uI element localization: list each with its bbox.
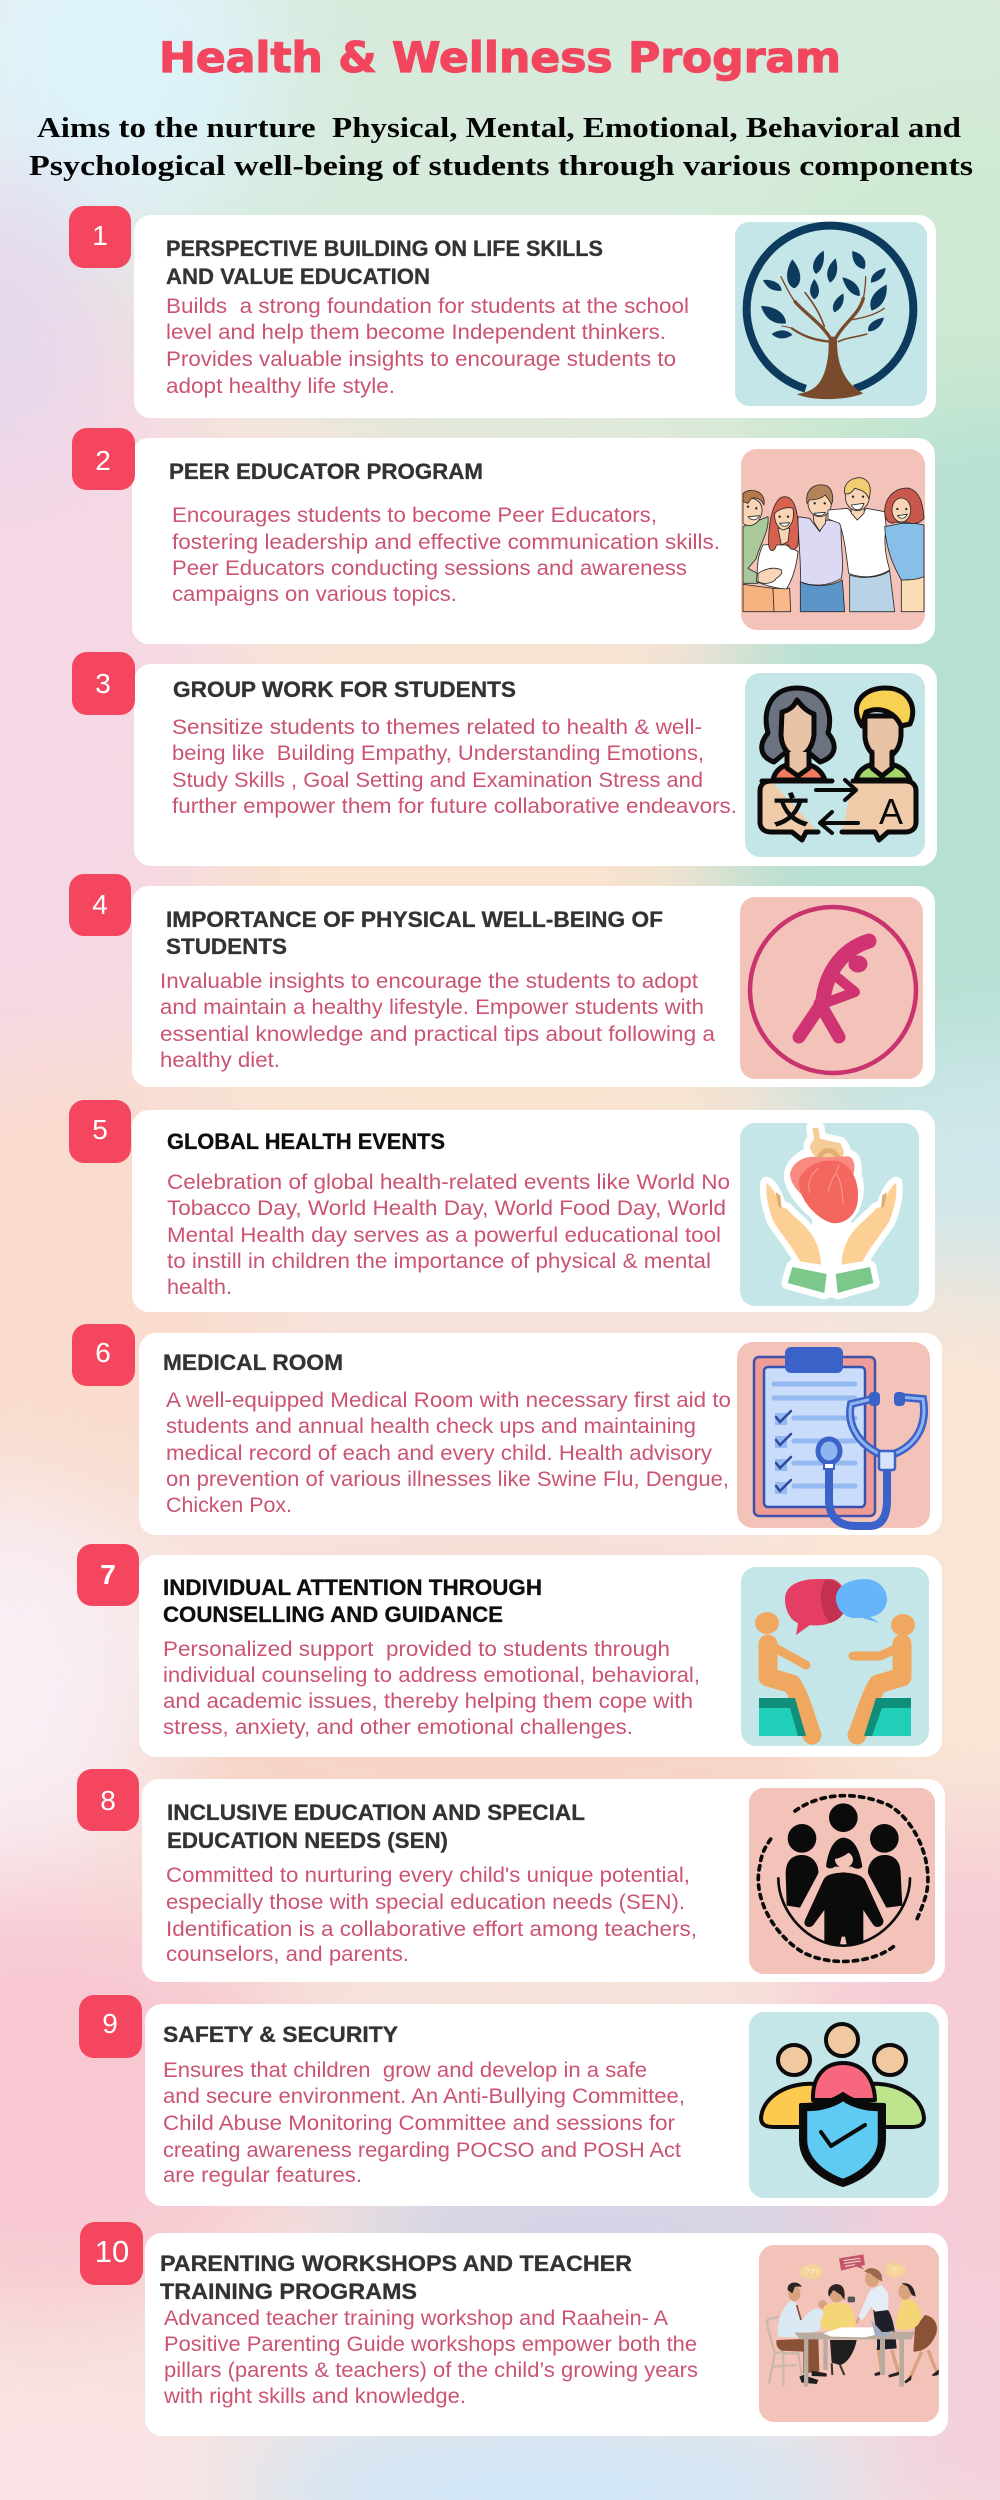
badge 3 [72, 652, 135, 715]
icon: two people translating [745, 673, 925, 857]
body text 10: Positive Parenting Guide workshops empower both the [164, 2333, 697, 2356]
panel 7: counselling and guidance [77, 1544, 942, 1757]
body text 4: essential knowledge and practical tips about following a [160, 1023, 715, 1046]
badge 1: 1 [92, 220, 108, 251]
body text 3 [172, 716, 737, 818]
body text 6 [166, 1389, 731, 1517]
badge 8: 8 [100, 1785, 116, 1816]
body text 8: Identification is a collaborative effort among teachers, [166, 1918, 697, 1941]
icon: people protected by shield [749, 2012, 939, 2198]
title: Health & Wellness Program [159, 33, 841, 82]
panel 4: physical well-being [69, 874, 935, 1087]
body text 9: and secure environment. An Anti-Bullying Committee, [163, 2085, 685, 2108]
body text 6: students and annual health check ups and maintaining [166, 1415, 696, 1438]
body text 9: Ensures that children grow and develop in a safe [163, 2059, 647, 2082]
body text 2: fostering leadership and effective communication skills. [172, 531, 720, 554]
body text 6: A well-equipped Medical Room with necessary first aid to [166, 1389, 731, 1412]
icon: team meeting around table: !!! [891, 2265, 899, 2275]
body text 5: health. [167, 1276, 232, 1299]
body text 10: Advanced teacher training workshop and Raahein- A [164, 2307, 668, 2330]
body text 1: level and help them become Independent thinkers. [166, 321, 666, 344]
body text 6: on prevention of various illnesses like Swine Flu, Dengue, [166, 1468, 729, 1491]
body text 2: Peer Educators conducting sessions and awareness [172, 557, 687, 580]
body text 7 [163, 1638, 700, 1739]
subtitle: Aims to the nurture Physical, Mental, Emotional, Behavioral and [37, 112, 961, 144]
body text 4: and maintain a healthy lifestyle. Empower students with [160, 996, 704, 1019]
heading 7: INDIVIDUAL ATTENTION THROUGH [163, 1575, 542, 1600]
heading 5: GLOBAL HEALTH EVENTS [167, 1129, 445, 1154]
badge 4 [69, 874, 131, 936]
body text 7: Personalized support provided to students through [163, 1638, 670, 1661]
heading 8 [167, 1800, 585, 1853]
panel 6: medical room [72, 1324, 942, 1535]
body text 1: Builds a strong foundation for students at the school [166, 295, 689, 318]
icon: tree in ring [735, 222, 927, 406]
body text 2: Encourages students to become Peer Educators, [172, 504, 657, 527]
subtitle [29, 112, 973, 182]
heading 10 [160, 2251, 632, 2304]
badge 4: 4 [92, 889, 108, 920]
body text 5: Celebration of global health-related events like World No [167, 1171, 730, 1194]
body text 8: counselors, and parents. [166, 1943, 409, 1966]
heading 7: COUNSELLING AND GUIDANCE [163, 1602, 503, 1627]
body text 10: with right skills and knowledge. [163, 2385, 466, 2408]
panel 2: peer educator program [72, 428, 935, 644]
icon: two people translating: A [879, 791, 903, 832]
badge 2 [72, 428, 135, 490]
heading 6: MEDICAL ROOM [163, 1350, 343, 1375]
heading 9: SAFETY & SECURITY [163, 2022, 398, 2047]
badge 7: 7 [100, 1559, 116, 1590]
badge 1 [69, 206, 131, 268]
badge 9: 9 [102, 2008, 118, 2039]
body text 4 [160, 970, 715, 1072]
body text 7: individual counseling to address emotional, behavioral, [163, 1664, 700, 1687]
heading 4: IMPORTANCE OF PHYSICAL WELL-BEING OF [166, 907, 663, 932]
badge 7 [77, 1544, 139, 1606]
heading 4: STUDENTS [166, 934, 287, 959]
body text 7: stress, anxiety, and other emotional challenges. [163, 1716, 633, 1739]
icon: stretching figure [740, 897, 923, 1079]
panel 10: parenting workshops and teacher training [80, 2222, 948, 2436]
panel 3: group work for students [72, 652, 937, 866]
heading 10: TRAINING PROGRAMS [160, 2279, 417, 2304]
body text 5 [167, 1171, 730, 1299]
badge 8 [77, 1769, 139, 1831]
body text 1 [166, 295, 689, 398]
heading 7 [163, 1575, 542, 1627]
icon: counselling conversation [741, 1567, 929, 1746]
body text 1: Provides valuable insights to encourage students to [166, 348, 676, 371]
badge 10 [80, 2222, 143, 2285]
icon: inclusive group in circle [749, 1788, 935, 1974]
body text 1: adopt healthy life style. [166, 375, 395, 398]
heading 2: PEER EDUCATOR PROGRAM [169, 459, 483, 484]
subtitle: Psychological well-being of students through various components [29, 150, 973, 182]
body text 2 [172, 504, 720, 606]
body text 8: especially those with special education needs (SEN). [166, 1891, 685, 1914]
badge 5 [69, 1100, 131, 1163]
heading 1: PERSPECTIVE BUILDING ON LIFE SKILLS [166, 236, 603, 261]
badge 2: 2 [95, 445, 111, 476]
body text 4: Invaluable insights to encourage the students to adopt [160, 970, 698, 993]
body text 4: healthy diet. [160, 1049, 280, 1072]
body text 10 [163, 2307, 698, 2408]
badge 5: 5 [92, 1114, 108, 1145]
badge 10: 10 [95, 2234, 129, 2269]
panel 1: life skills and value education [69, 206, 936, 418]
body text 6: medical record of each and every child. Health advisory [166, 1442, 713, 1465]
icon: group of friends [741, 449, 925, 630]
heading 1 [166, 236, 603, 289]
body text 5: to instill in children the importance of physical & mental [167, 1250, 711, 1273]
badge 6: 6 [95, 1337, 111, 1368]
heading 1: AND VALUE EDUCATION [166, 264, 430, 289]
body text 3: further empower them for future collaborative endeavors. [172, 795, 737, 818]
body text 5: Tobacco Day, World Health Day, World Food Day, World [167, 1197, 726, 1220]
icon: two people translating: 文 [773, 782, 809, 834]
body text 9: creating awareness regarding POCSO and POSH Act [163, 2139, 681, 2162]
icon: team meeting around table: ??? [804, 2267, 819, 2277]
icon: team meeting around table [759, 2245, 939, 2422]
panel 5: global health events [69, 1100, 935, 1312]
body text 7: and academic issues, thereby helping them cope with [163, 1690, 693, 1713]
badge 9 [79, 1995, 142, 2058]
body text 6: Chicken Pox. [166, 1494, 292, 1517]
body text 3: Study Skills , Goal Setting and Examination Stress and [172, 769, 703, 792]
panel 8: inclusive education and SEN [77, 1769, 945, 1982]
body text 3: Sensitize students to themes related to health & well- [172, 716, 702, 739]
heading 8: EDUCATION NEEDS (SEN) [167, 1828, 448, 1853]
body text 8: Committed to nurturing every child's unique potential, [166, 1864, 690, 1887]
heading 3: GROUP WORK FOR STUDENTS [173, 677, 516, 702]
heading 10: PARENTING WORKSHOPS AND TEACHER [160, 2251, 632, 2276]
body text 5: Mental Health day serves as a powerful educational tool [167, 1224, 721, 1247]
body text 10: pillars (parents & teachers) of the child’s growing years [164, 2359, 698, 2382]
badge 6 [72, 1324, 135, 1386]
icon: clipboard and stethoscope [737, 1342, 930, 1528]
panel 9: safety and security [79, 1995, 948, 2206]
badge 3: 3 [95, 668, 111, 699]
body text 3: being like Building Empathy, Understanding Emotions, [172, 742, 704, 765]
body text 9 [163, 2059, 685, 2187]
body text 9: are regular features. [163, 2164, 362, 2187]
body text 8 [166, 1864, 697, 1966]
body text 2: campaigns on various topics. [172, 583, 457, 606]
icon: hands holding heart [740, 1123, 919, 1306]
body text 9: Child Abuse Monitoring Committee and sessions for [163, 2112, 675, 2135]
heading 4 [166, 907, 663, 959]
heading 8: INCLUSIVE EDUCATION AND SPECIAL [167, 1800, 585, 1825]
